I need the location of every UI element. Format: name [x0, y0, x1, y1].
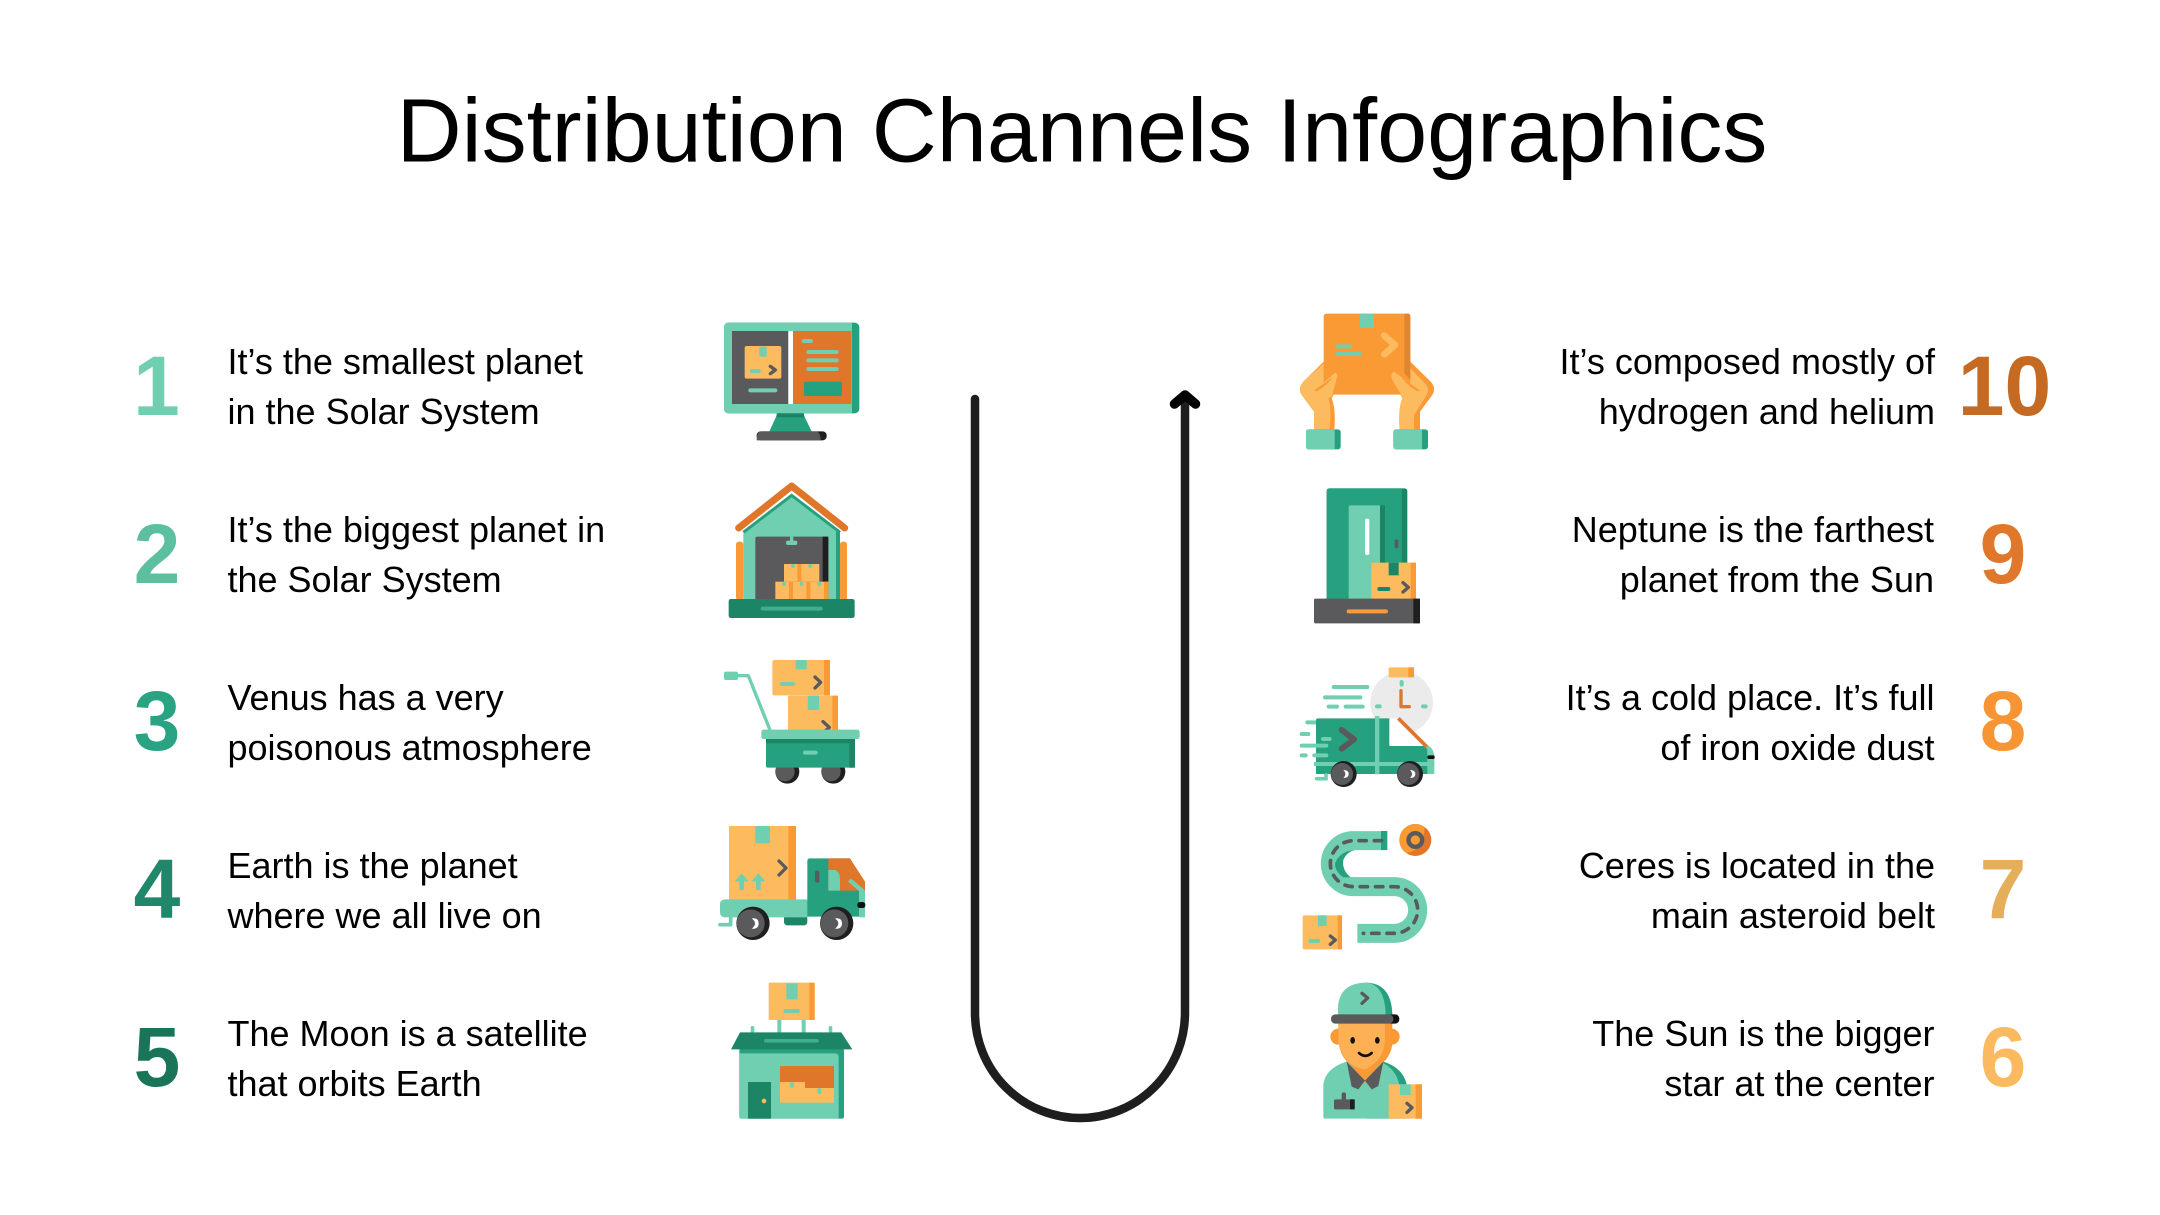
text block 2: It’s the biggest planet in	[228, 509, 605, 550]
icon: winding route with pin and parcel	[1303, 824, 1431, 949]
text block 4: where we all live on	[226, 895, 542, 936]
row 2: number and text	[134, 507, 605, 601]
text block 2: the Solar System	[228, 559, 502, 600]
row 10: number and text	[1560, 339, 2051, 433]
icon: storefront with box	[731, 983, 852, 1119]
text block 5: The Moon is a satellite	[228, 1013, 588, 1054]
text block 10: It’s composed mostly of	[1560, 341, 1935, 382]
number 6: 6	[1980, 1010, 2026, 1104]
text block 9: planet from the Sun	[1620, 559, 1934, 600]
text block 8: of iron oxide dust	[1660, 727, 1934, 768]
number 8: 8	[1980, 674, 2026, 768]
icon: warehouse	[729, 486, 855, 618]
row 9: number and text	[1572, 507, 2026, 601]
text block 1: It’s the smallest planet	[228, 341, 583, 382]
number 3: 3	[134, 674, 180, 768]
number 9: 9	[1980, 507, 2026, 601]
icon: delivery truck	[720, 826, 865, 940]
text block 6: The Sun is the bigger	[1592, 1013, 1934, 1054]
row 3: number and text	[134, 674, 592, 768]
text block 4: Earth is the planet	[228, 845, 518, 886]
icon: online store monitor	[724, 323, 859, 440]
row 4: number and text	[134, 842, 542, 936]
title: Distribution Channels Infographics	[397, 82, 1767, 182]
row 8: number and text	[1566, 674, 2026, 768]
text block 3: poisonous atmosphere	[228, 727, 592, 768]
number 7: 7	[1980, 842, 2026, 936]
text block 1: in the Solar System	[228, 391, 540, 432]
text block 8: It’s a cold place. It’s full	[1566, 677, 1934, 718]
text block 6: star at the center	[1664, 1063, 1935, 1104]
text block 9: Neptune is the farthest	[1572, 509, 1934, 550]
text block 7: Ceres is located in the	[1579, 845, 1935, 886]
icon: hands holding a parcel	[1300, 314, 1434, 449]
number 5: 5	[134, 1010, 180, 1104]
arrow: U-shaped flow from left column to right column	[975, 395, 1196, 1118]
text block 3: Venus has a very	[228, 677, 504, 718]
row 6: number and text	[1592, 1010, 2026, 1104]
row 1: number and text	[133, 339, 583, 433]
number 10: 10	[1958, 339, 2051, 433]
number 2: 2	[134, 507, 180, 601]
text block 10: hydrogen and helium	[1599, 391, 1935, 432]
icon: fast delivery van with clock	[1300, 667, 1435, 787]
icon: hand cart with boxes	[724, 660, 860, 784]
row 7: number and text	[1579, 842, 2026, 936]
text block 7: main asteroid belt	[1651, 895, 1935, 936]
icon: delivery worker	[1323, 983, 1422, 1119]
row 5: number and text	[134, 1010, 588, 1104]
icon: doorstep delivery	[1314, 488, 1420, 623]
number 1: 1	[133, 339, 180, 433]
text block 5: that orbits Earth	[228, 1063, 482, 1104]
number 4: 4	[134, 842, 181, 936]
